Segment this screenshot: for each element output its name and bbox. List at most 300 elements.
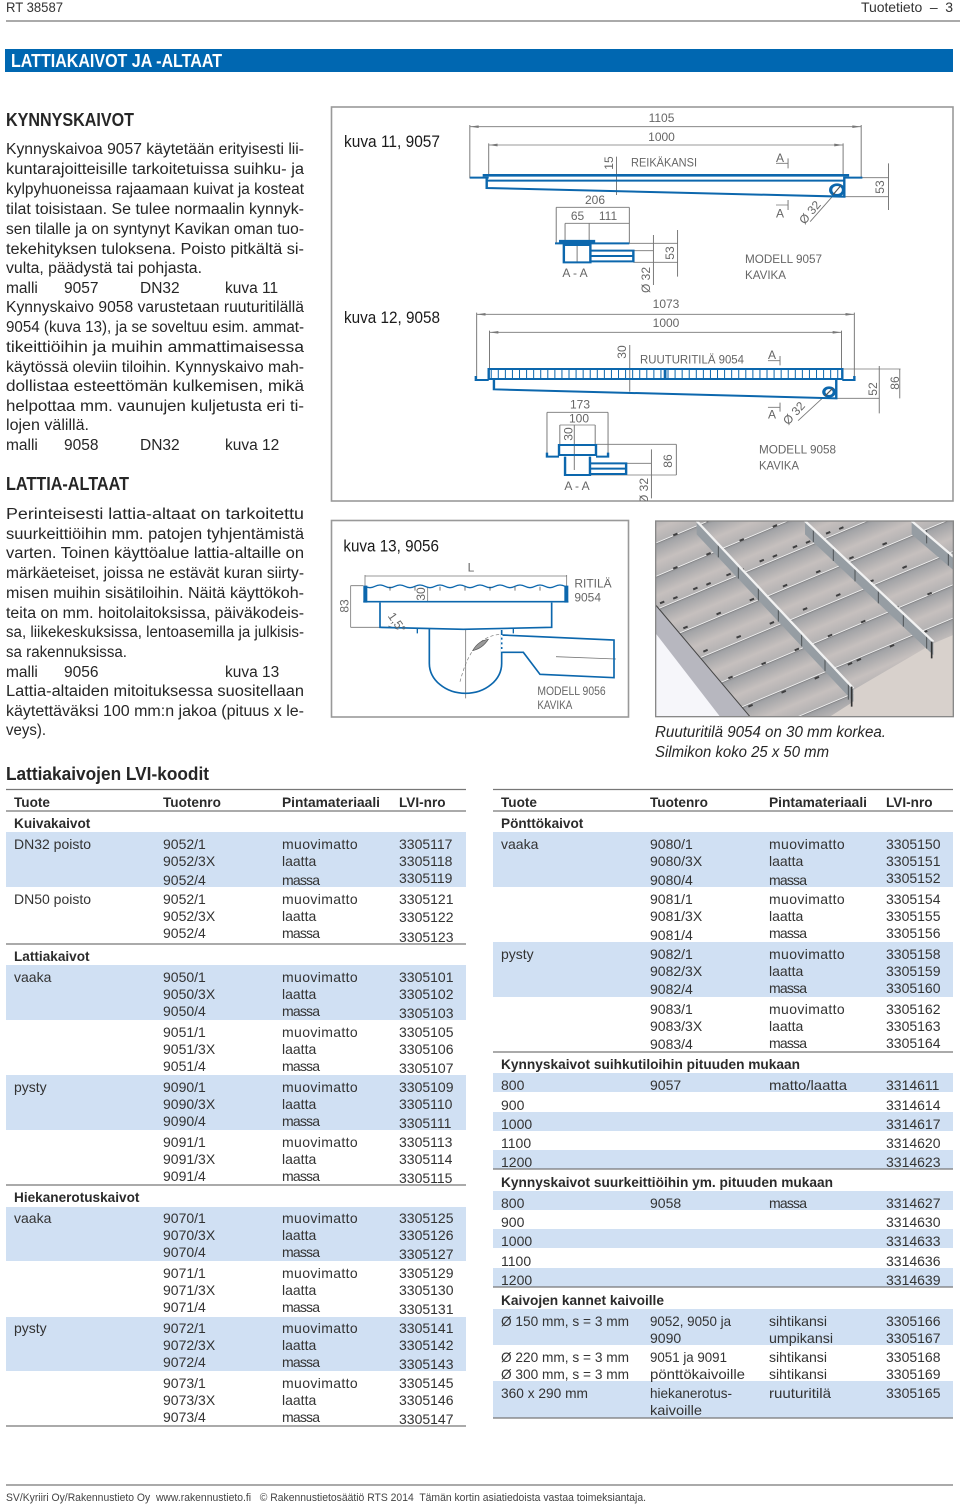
section: kaivojen kannet: sihtikansi: [769, 1366, 827, 1382]
section: hiekanerotuskaivot: muovimatto: [282, 1265, 358, 1281]
section: lattiakaivot: 9091/4: [163, 1168, 206, 1184]
section: lattiakaivot: laatta: [282, 1096, 316, 1112]
section: kuivakaivot: 3305118: [399, 853, 453, 869]
photo: ruuturitilä grating: [655, 520, 954, 718]
section: kynnyskaivot suurkeittiöihin: [501, 1175, 941, 1288]
drawing: kuva 11, 9057: KAVIKA: [745, 268, 786, 282]
table: left LVI codes: [6, 790, 466, 1427]
drawing: kuva 13, 9056: 9054: [574, 590, 601, 604]
section: pönttökaivot: 9082/4: [650, 981, 693, 997]
section: kuivakaivot: DN50 poisto: [14, 891, 91, 907]
section: kaivojen kannet: ruuturitilä: [769, 1385, 831, 1401]
drawing: kuva 11, 9057: 1000: [648, 130, 675, 144]
heading: LVI-koodit: Lattiakaivojen LVI-koodit: [6, 764, 209, 784]
section: kuivakaivot: DN32 poisto: [14, 836, 91, 852]
section: kaivojen kannet: 9090: [650, 1330, 681, 1346]
section: kynnyskaivot suurkeittiöihin: 1000: [501, 1233, 532, 1249]
text block: lattia-altaat: Lattia-altaiden mitoituksessa suositellaan: [6, 683, 304, 700]
section: hiekanerotuskaivot: 3305145: [399, 1375, 454, 1391]
section: lattiakaivot: muovimatto: [282, 1024, 358, 1040]
drawing: kuva 12, 9058: 86: [661, 454, 675, 468]
section: pönttökaivot: 3305156: [886, 925, 941, 941]
section: kynnyskaivot suurkeittiöihin: 1200: [501, 1272, 532, 1288]
drawing: kuva 12, 9058: A - A: [564, 479, 590, 493]
section: pönttökaivot: pysty: [501, 946, 534, 962]
table: right LVI codes: [493, 790, 953, 1418]
drawing: kuva 13, 9056: kuva 13, 9056: [343, 538, 439, 556]
section: kynnyskaivot suihkutiloihin: [501, 1057, 941, 1170]
section: hiekanerotuskaivot: muovimatto: [282, 1375, 358, 1391]
drawing: kuva 12, 9058: MODELL 9058: [759, 442, 836, 456]
section: hiekanerotuskaivot: muovimatto: [282, 1210, 358, 1226]
table header row: Pintamateriaali: [769, 795, 867, 810]
footer: SV/Kyriiri Oy/Rakennustieto Oy www.rakennustieto.fi © Rakennustietosäätiö RTS 2014 Tämän kortin asiatiedoista vastaa toimeksiantaja.: [6, 1492, 646, 1504]
section: pönttökaivot: laatta: [769, 908, 803, 924]
drawing: kuva 12, 9058: 173: [570, 398, 590, 412]
section: kynnyskaivot suurkeittiöihin: Kynnyskaivot suurkeittiöihin ym. pituuden mukaan: [501, 1175, 833, 1190]
text block: kynnyskaivot: Kynnyskaivoa 9057 käytetään erityisesti lii-: [6, 141, 304, 158]
section: hiekanerotuskaivot: 9070/1: [163, 1210, 206, 1226]
drawing: kuva 12, 9058: 52: [866, 382, 880, 396]
photo caption: Silmikon koko 25 x 50 mm: [655, 744, 829, 761]
drawing: kuva 12, 9058: 1000: [653, 316, 680, 330]
section: hiekanerotuskaivot: 3305143: [399, 1356, 454, 1372]
section: hiekanerotuskaivot: laatta: [282, 1282, 316, 1298]
table header row: Tuotenro: [163, 795, 221, 810]
section: kaivojen kannet: 3305165: [886, 1385, 941, 1401]
drawing: kuva 11, 9057: A: [776, 151, 784, 165]
section: lattiakaivot: pysty: [14, 1079, 47, 1095]
section: hiekanerotuskaivot: massa: [282, 1409, 320, 1425]
section: kaivojen kannet: 3305166: [886, 1313, 941, 1329]
section: pönttökaivot: massa: [769, 980, 807, 996]
section: lattiakaivot: 3305101: [399, 969, 454, 985]
text block: kynnyskaivot: 9058: [64, 437, 98, 454]
text block: kynnyskaivot: DN32: [140, 437, 180, 454]
section: kynnyskaivot suihkutiloihin: 3314620: [886, 1135, 941, 1151]
section: pönttökaivot: 9083/1: [650, 1001, 693, 1017]
section: hiekanerotuskaivot: 9071/4: [163, 1299, 206, 1315]
section: lattiakaivot: massa: [282, 1058, 320, 1074]
section: kynnyskaivot suihkutiloihin: Kynnyskaivot suihkutiloihin pituuden mukaan: [501, 1057, 800, 1072]
text block: kynnyskaivot: kuva 12: [225, 437, 279, 454]
drawing: kuva 12, 9058: Ø 32: [780, 399, 808, 428]
text block: lattia-altaat: varten. Toinen käyttöalue lattia-altaille on: [6, 545, 304, 562]
section: pönttökaivot: 3305158: [886, 946, 941, 962]
drawing: kuva 11, 9057: MODELL 9057: [745, 252, 822, 266]
section: lattiakaivot: 9091/1: [163, 1134, 206, 1150]
section: kuivakaivot: 3305121: [399, 891, 454, 907]
section: lattiakaivot: 3305109: [399, 1079, 454, 1095]
drawing: kuva 12, 9058: 100: [569, 412, 589, 426]
section: kuivakaivot: Kuivakaivot: [14, 816, 91, 831]
section: kuivakaivot: 3305123: [399, 929, 454, 945]
text block: lattia-altaat: 9056: [64, 664, 98, 681]
section: kaivojen kannet: Kaivojen kannet kaivoille: [501, 1293, 664, 1308]
section: hiekanerotuskaivot: 9070/4: [163, 1244, 206, 1260]
drawing: kuva 12, 9058: [344, 297, 902, 504]
panel: kuva 13 frame: [332, 520, 628, 717]
section: kuivakaivot: massa: [282, 925, 320, 941]
section: kuivakaivot: muovimatto: [282, 891, 358, 907]
text block: kynnyskaivot: helpottaa mm. vaunujen kuljetusta eri ti-: [6, 398, 304, 415]
section: pönttökaivot: 9082/1: [650, 946, 693, 962]
section: kaivojen kannet: Ø 150 mm, s = 3 mm: [501, 1313, 629, 1329]
section: pönttökaivot: 3305150: [886, 836, 941, 852]
section: kynnyskaivot suurkeittiöihin: massa: [769, 1195, 807, 1211]
section: kaivojen kannet: umpikansi: [769, 1330, 833, 1346]
text block: kynnyskaivot: KYNNYSKAIVOT: [6, 110, 134, 130]
section: pönttökaivot: laatta: [769, 853, 803, 869]
section: hiekanerotuskaivot: 9072/3X: [163, 1337, 216, 1353]
section: pönttökaivot: 9083/4: [650, 1036, 693, 1052]
section: pönttökaivot: 9081/4: [650, 927, 693, 943]
drawing: kuva 13, 9056: KAVIKA: [537, 698, 572, 712]
section: lattiakaivot: laatta: [282, 1041, 316, 1057]
section: kuivakaivot: 3305122: [399, 909, 454, 925]
section: pönttökaivot: massa: [769, 925, 807, 941]
text block: lattia-altaat: märkäeteiset, joissa ne estävät kuran siirty-: [6, 565, 304, 582]
section: hiekanerotuskaivot: laatta: [282, 1337, 316, 1353]
section: hiekanerotuskaivot: 3305147: [399, 1411, 454, 1427]
drawing: kuva 12, 9058: Ø 32: [637, 478, 651, 504]
section: pönttökaivot: 9080/1: [650, 836, 693, 852]
section: lattiakaivot: 3305110: [399, 1096, 453, 1112]
section: lattiakaivot: 9090/4: [163, 1113, 206, 1129]
table header row: Tuote: [501, 795, 537, 810]
section: pönttökaivot: [501, 816, 941, 1052]
section: hiekanerotuskaivot: 3305146: [399, 1392, 454, 1408]
section: kuivakaivot: [14, 816, 454, 945]
drawing: kuva 11, 9057: [344, 111, 889, 293]
section: kynnyskaivot suihkutiloihin: 3314623: [886, 1154, 941, 1170]
table header row: [14, 795, 446, 810]
section: pönttökaivot: 9080/3X: [650, 853, 703, 869]
section: lattiakaivot: 3305113: [399, 1134, 453, 1150]
text block: lattia-altaat: misen muihin sisätiloihin. Näitä käyttökoh-: [6, 585, 304, 602]
table header row: LVI-nro: [886, 795, 933, 810]
photo caption: Ruuturitilä 9054 on 30 mm korkea.: [655, 724, 886, 741]
section: kynnyskaivot suihkutiloihin: 3314614: [886, 1097, 941, 1113]
section: pönttökaivot: 9082/3X: [650, 963, 703, 979]
section: kaivojen kannet: 9052, 9050 ja: [650, 1313, 731, 1329]
section: kynnyskaivot suihkutiloihin: 1200: [501, 1154, 532, 1170]
section: lattiakaivot: 9090/3X: [163, 1096, 216, 1112]
text block: kynnyskaivot: sen tilalle ja on syntynyt Kavikan oman tuo-: [6, 221, 304, 238]
text block: kynnyskaivot: dollistaa esteettömän kulkemisen, mikä: [6, 378, 304, 395]
section: pönttökaivot: 3305162: [886, 1001, 941, 1017]
text block: kynnyskaivot: tilat toisistaan. Se tulee normaalin kynnyk-: [6, 201, 304, 218]
section: lattiakaivot: 3305103: [399, 1005, 454, 1021]
section: kynnyskaivot suurkeittiöihin: 9058: [650, 1195, 681, 1211]
section: hiekanerotuskaivot: 9073/3X: [163, 1392, 216, 1408]
section: hiekanerotuskaivot: 9071/3X: [163, 1282, 216, 1298]
section: hiekanerotuskaivot: 3305131: [399, 1301, 454, 1317]
text block: kynnyskaivot: tikeittiöihin ja muihin ammattimaisessa: [6, 339, 304, 356]
section: hiekanerotuskaivot: laatta: [282, 1392, 316, 1408]
table header row: [501, 795, 933, 810]
table header row: Pintamateriaali: [282, 795, 380, 810]
section: kaivojen kannet: sihtikansi: [769, 1349, 827, 1365]
section: lattiakaivot: 3305115: [399, 1170, 453, 1186]
text block: kynnyskaivot: kuntarajoitteisille tarkoitetuissa suihku- ja: [6, 161, 304, 178]
section: hiekanerotuskaivot: pysty: [14, 1320, 47, 1336]
drawing: kuva 12, 9058: 1073: [653, 297, 680, 311]
drawing: kuva 12, 9058: 30: [562, 427, 576, 441]
section: kynnyskaivot suurkeittiöihin: 900: [501, 1214, 525, 1230]
drawing: kuva 11, 9057: 53: [663, 246, 677, 260]
section: lattiakaivot: [14, 949, 454, 1186]
section: lattiakaivot: 3305114: [399, 1151, 453, 1167]
section: kuivakaivot: muovimatto: [282, 836, 358, 852]
section: kaivojen kannet: 3305167: [886, 1330, 941, 1346]
section: kynnyskaivot suihkutiloihin: 1000: [501, 1116, 532, 1132]
section: kynnyskaivot suihkutiloihin: matto/laatta: [769, 1077, 847, 1093]
section: kuivakaivot: 3305119: [399, 870, 453, 886]
section: lattiakaivot: 9051/1: [163, 1024, 206, 1040]
section: hiekanerotuskaivot: muovimatto: [282, 1320, 358, 1336]
section: pönttökaivot: 3305152: [886, 870, 941, 886]
text block: lattia-altaat: [6, 474, 304, 739]
section: lattiakaivot: 9050/3X: [163, 986, 216, 1002]
text block: lattia-altaat: sa, liikekeskuksissa, lentoasemilla ja julkisis-: [6, 624, 304, 641]
section: pönttökaivot: massa: [769, 872, 807, 888]
section: kynnyskaivot suihkutiloihin: 900: [501, 1097, 525, 1113]
section: hiekanerotuskaivot: 9073/1: [163, 1375, 206, 1391]
section: pönttökaivot: 3305155: [886, 908, 941, 924]
title banner: LATTIAKAIVOT JA -ALTAAT: [11, 51, 222, 71]
section: pönttökaivot: 3305164: [886, 1035, 941, 1051]
text block: kynnyskaivot: tekehityksen tuloksena. Poisto pitkältä si-: [6, 241, 304, 258]
section: hiekanerotuskaivot: 3305126: [399, 1227, 454, 1243]
section: kynnyskaivot suihkutiloihin: 800: [501, 1077, 525, 1093]
drawing: kuva 12, 9058: kuva 12, 9058: [344, 309, 440, 327]
section: kynnyskaivot suurkeittiöihin: 1100: [501, 1253, 531, 1269]
section: pönttökaivot: muovimatto: [769, 891, 845, 907]
drawing: kuva 11, 9057: A: [776, 206, 784, 220]
drawing: kuva 11, 9057: Ø 32: [639, 267, 653, 293]
section: pönttökaivot: 9083/3X: [650, 1018, 703, 1034]
section: kaivojen kannet: Ø 300 mm, s = 3 mm: [501, 1366, 629, 1382]
drawing: kuva 11, 9057: Ø 32: [796, 198, 824, 227]
text block: kynnyskaivot: vulta, päädystä tai pohjasta.: [6, 260, 202, 277]
text block: kynnyskaivot: malli: [6, 437, 38, 454]
drawing: kuva 12, 9058: A: [768, 408, 776, 422]
section: hiekanerotuskaivot: laatta: [282, 1227, 316, 1243]
section: lattiakaivot: laatta: [282, 986, 316, 1002]
text block: lattia-altaat: kuva 13: [225, 664, 279, 681]
section: lattiakaivot: 3305107: [399, 1060, 454, 1076]
section: hiekanerotuskaivot: massa: [282, 1244, 320, 1260]
section: kynnyskaivot suurkeittiöihin: 3314636: [886, 1253, 941, 1269]
section: lattiakaivot: 9050/1: [163, 969, 206, 985]
drawing: kuva 13, 9056: L: [468, 561, 475, 575]
section: kaivojen kannet: hiekanerotus-: [650, 1385, 732, 1401]
section: lattiakaivot: muovimatto: [282, 1079, 358, 1095]
section: pönttökaivot: 9081/1: [650, 891, 693, 907]
drawing: kuva 12, 9058: KAVIKA: [759, 458, 799, 472]
section: lattiakaivot: 9051/3X: [163, 1041, 216, 1057]
section: hiekanerotuskaivot: 3305130: [399, 1282, 454, 1298]
drawing: kuva 11, 9057: 53: [873, 180, 887, 194]
drawing: kuva 13, 9056: 83: [337, 599, 351, 613]
section: lattiakaivot: massa: [282, 1168, 320, 1184]
section: lattiakaivot: massa: [282, 1003, 320, 1019]
section: kuivakaivot: laatta: [282, 853, 316, 869]
section: hiekanerotuskaivot: 9071/1: [163, 1265, 206, 1281]
drawing: kuva 13, 9056: 30: [414, 587, 428, 601]
section: lattiakaivot: muovimatto: [282, 969, 358, 985]
text block: lattia-altaat: käytettäväksi 100 mm:n jakoa (pituus x le-: [6, 703, 304, 720]
drawing: kuva 13, 9056: MODELL 9056: [537, 684, 606, 698]
section: kaivojen kannet: sihtikansi: [769, 1313, 827, 1329]
text block: lattia-altaat: suurkeittiöihin mm. patojen tyhjentämistä: [6, 526, 304, 543]
section: kynnyskaivot suihkutiloihin: 9057: [650, 1077, 681, 1093]
section: hiekanerotuskaivot: 3305141: [399, 1320, 454, 1336]
section: kuivakaivot: 9052/3X: [163, 908, 216, 924]
section: pönttökaivot: 3305159: [886, 963, 941, 979]
section: hiekanerotuskaivot: massa: [282, 1354, 320, 1370]
section: pönttökaivot: massa: [769, 1035, 807, 1051]
section: kaivojen kannet: 360 x 290 mm: [501, 1385, 588, 1401]
text block: kynnyskaivot: malli: [6, 280, 38, 297]
section: pönttökaivot: 3305160: [886, 980, 941, 996]
text block: kynnyskaivot: 9057: [64, 280, 98, 297]
section: pönttökaivot: vaaka: [501, 836, 539, 852]
section: hiekanerotuskaivot: 3305129: [399, 1265, 454, 1281]
section: lattiakaivot: vaaka: [14, 969, 52, 985]
section: lattiakaivot: 9051/4: [163, 1058, 206, 1074]
section: pönttökaivot: 9081/3X: [650, 908, 703, 924]
section: kaivojen kannet: [501, 1293, 941, 1418]
section: lattiakaivot: 3305111: [399, 1115, 452, 1131]
photo caption: [655, 724, 886, 761]
section: pönttökaivot: laatta: [769, 1018, 803, 1034]
section: kynnyskaivot suihkutiloihin: 3314617: [886, 1116, 941, 1132]
drawing: kuva 13, 9056: 1,5°: [385, 610, 409, 635]
section: lattiakaivot: 9091/3X: [163, 1151, 216, 1167]
section: lattiakaivot: 9090/1: [163, 1079, 206, 1095]
table header row: Tuote: [14, 795, 50, 810]
section: hiekanerotuskaivot: [14, 1190, 454, 1427]
section: lattiakaivot: massa: [282, 1113, 320, 1129]
section: kynnyskaivot suurkeittiöihin: 800: [501, 1195, 525, 1211]
section: kaivojen kannet: Ø 220 mm, s = 3 mm: [501, 1349, 629, 1365]
section: lattiakaivot: 3305105: [399, 1024, 454, 1040]
section: hiekanerotuskaivot: 9072/4: [163, 1354, 206, 1370]
section: pönttökaivot: Pönttökaivot: [501, 816, 584, 831]
section: hiekanerotuskaivot: Hiekanerotuskaivot: [14, 1190, 140, 1205]
section: kuivakaivot: 9052/4: [163, 925, 206, 941]
drawing: kuva 11, 9057: REIKÄKANSI: [631, 156, 697, 170]
section: kuivakaivot: 9052/4: [163, 872, 206, 888]
section: hiekanerotuskaivot: 9073/4: [163, 1409, 206, 1425]
section: pönttökaivot: laatta: [769, 963, 803, 979]
drawing: kuva 12, 9058: 86: [888, 376, 902, 390]
drawing: kuva 13, 9056: RITILÄ: [574, 576, 612, 590]
text block: lattia-altaat: Perinteisesti lattia-altaat on tarkoitettu: [6, 506, 304, 523]
table header row: LVI-nro: [399, 795, 446, 810]
section: kaivojen kannet: 3305169: [886, 1366, 941, 1382]
section: lattiakaivot: 9050/4: [163, 1003, 206, 1019]
text block: lattia-altaat: malli: [6, 664, 38, 681]
section: lattiakaivot: Lattiakaivot: [14, 949, 90, 964]
section: lattiakaivot: laatta: [282, 1151, 316, 1167]
section: kynnyskaivot suurkeittiöihin: 3314627: [886, 1195, 941, 1211]
section: kuivakaivot: 9052/1: [163, 891, 206, 907]
section: hiekanerotuskaivot: 3305142: [399, 1337, 454, 1353]
drawing: kuva 11, 9057: 206: [585, 193, 605, 207]
section: hiekanerotuskaivot: 3305127: [399, 1246, 454, 1262]
section: kaivojen kannet: kaivoille: [650, 1402, 702, 1418]
drawing: kuva 11, 9057: 15: [602, 156, 616, 170]
section: pönttökaivot: 3305163: [886, 1018, 941, 1034]
drawing: kuva 13, 9056: [337, 538, 616, 712]
drawing: kuva 11, 9057: 111: [599, 209, 617, 223]
section: hiekanerotuskaivot: vaaka: [14, 1210, 52, 1226]
section: lattiakaivot: muovimatto: [282, 1134, 358, 1150]
text block: lattia-altaat: sa rakennuksissa.: [6, 644, 127, 661]
section: pönttökaivot: muovimatto: [769, 1001, 845, 1017]
section: pönttökaivot: 3305154: [886, 891, 941, 907]
text block: lattia-altaat: teita on mm. hoitolaitoksissa, päiväkodeis-: [6, 605, 304, 622]
section: pönttökaivot: 3305151: [886, 853, 941, 869]
section: kuivakaivot: 9052/1: [163, 836, 206, 852]
text block: kynnyskaivot: DN32: [140, 280, 180, 297]
section: kaivojen kannet: pönttökaivoille: [650, 1366, 745, 1382]
text block: kynnyskaivot: [6, 110, 305, 454]
text block: kynnyskaivot: 9054 (kuva 13), ja se soveltuu esim. ammat-: [6, 319, 304, 336]
section: lattiakaivot: 3305102: [399, 986, 454, 1002]
drawing: kuva 12, 9058: A: [768, 348, 776, 362]
text block: lattia-altaat: veys).: [6, 722, 46, 739]
section: kuivakaivot: 3305117: [399, 836, 453, 852]
panel: kuva 11 and kuva 12 frame: [332, 107, 953, 501]
drawing: kuva 11, 9057: 1105: [649, 111, 675, 125]
section: lattiakaivot: 3305106: [399, 1041, 454, 1057]
section: kynnyskaivot suihkutiloihin: 3314611: [886, 1077, 940, 1093]
section: kuivakaivot: 9052/3X: [163, 853, 216, 869]
section: kaivojen kannet: 9051 ja 9091: [650, 1349, 727, 1365]
section: kynnyskaivot suurkeittiöihin: 3314633: [886, 1233, 941, 1249]
section: pönttökaivot: 9080/4: [650, 872, 693, 888]
section: pönttökaivot: muovimatto: [769, 836, 845, 852]
section: kynnyskaivot suurkeittiöihin: 3314630: [886, 1214, 941, 1230]
drawing: kuva 12, 9058: 30: [615, 345, 629, 359]
text block: kynnyskaivot: käytössä oleviin tiloihin. Kynnyskaivo mah-: [6, 359, 304, 376]
section: kuivakaivot: laatta: [282, 908, 316, 924]
text block: kynnyskaivot: Kynnyskaivo 9058 varustetaan ruuturitilällä: [6, 299, 304, 316]
text block: kynnyskaivot: lojen välillä.: [6, 417, 89, 434]
section: hiekanerotuskaivot: massa: [282, 1299, 320, 1315]
section: hiekanerotuskaivot: 9070/3X: [163, 1227, 216, 1243]
drawing: kuva 11, 9057: 65: [571, 209, 584, 223]
section: pönttökaivot: muovimatto: [769, 946, 845, 962]
page header: [6, 0, 960, 21]
drawing: kuva 12, 9058: RUUTURITILÄ 9054: [640, 352, 744, 366]
section: kaivojen kannet: 3305168: [886, 1349, 941, 1365]
section: kuivakaivot: massa: [282, 872, 320, 888]
section: kynnyskaivot suihkutiloihin: 1100: [501, 1135, 531, 1151]
section: hiekanerotuskaivot: 9072/1: [163, 1320, 206, 1336]
drawing: kuva 11, 9057: kuva 11, 9057: [344, 133, 440, 151]
text block: kynnyskaivot: kuva 11: [225, 280, 278, 297]
section: kynnyskaivot suurkeittiöihin: 3314639: [886, 1272, 941, 1288]
table header row: Tuotenro: [650, 795, 708, 810]
drawing: kuva 11, 9057: A - A: [562, 266, 588, 280]
section: hiekanerotuskaivot: 3305125: [399, 1210, 454, 1226]
text block: lattia-altaat: LATTIA-ALTAAT: [6, 474, 129, 494]
